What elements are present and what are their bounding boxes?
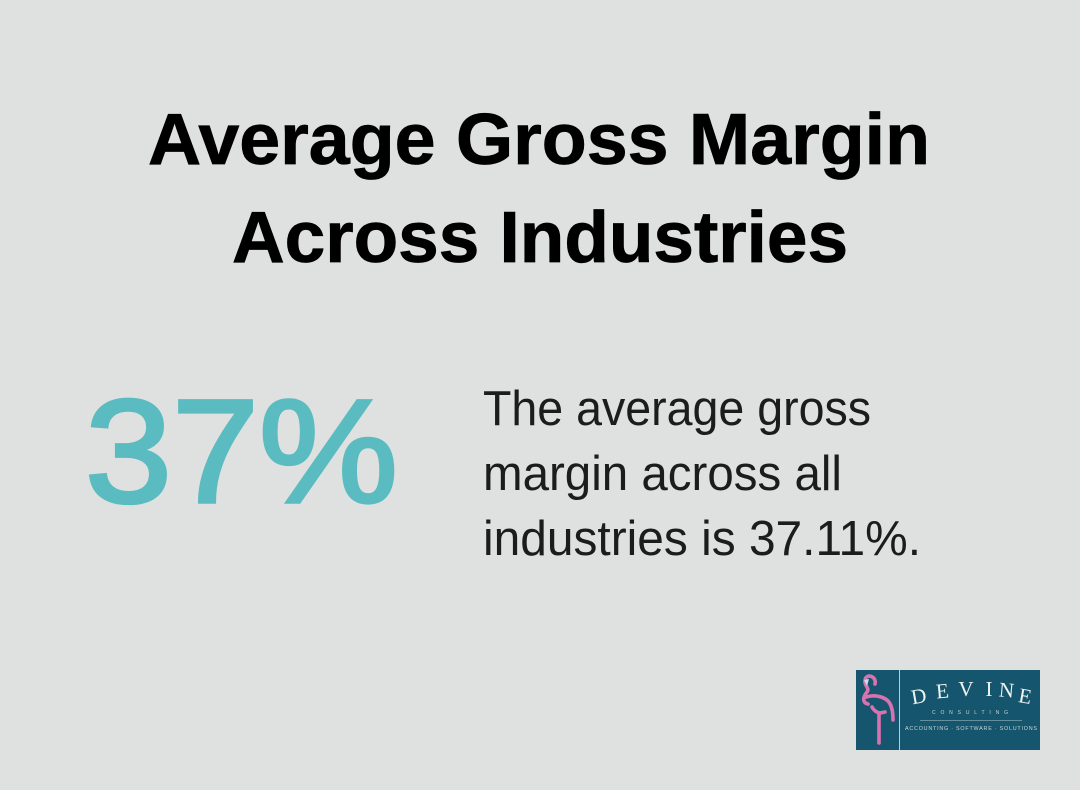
logo wordmark: ACCOUNTING · SOFTWARE · SOLUTIONS: [905, 726, 1037, 732]
big stat: 37%: 37%: [85, 370, 398, 534]
description text: industries is 37.11%.: [483, 512, 921, 566]
logo wordmark: V: [958, 677, 974, 701]
title: [148, 100, 930, 278]
logo wordmark: D: [909, 683, 928, 709]
logo: Devine Consulting: [856, 670, 1040, 750]
logo wordmark: I: [986, 677, 992, 701]
logo wordmark: CONSULTING: [932, 710, 1008, 716]
description text: margin across all: [483, 447, 842, 501]
title: Average Gross Margin: [148, 100, 930, 180]
logo wordmark: E: [935, 679, 950, 704]
logo wordmark: E: [1017, 683, 1034, 709]
icon: flamingo: [864, 676, 893, 743]
logo wordmark: [905, 677, 1037, 732]
title: Across Industries: [232, 198, 848, 278]
logo wordmark: N: [998, 677, 1015, 703]
description text: [483, 382, 921, 566]
description text: The average gross: [483, 382, 871, 436]
